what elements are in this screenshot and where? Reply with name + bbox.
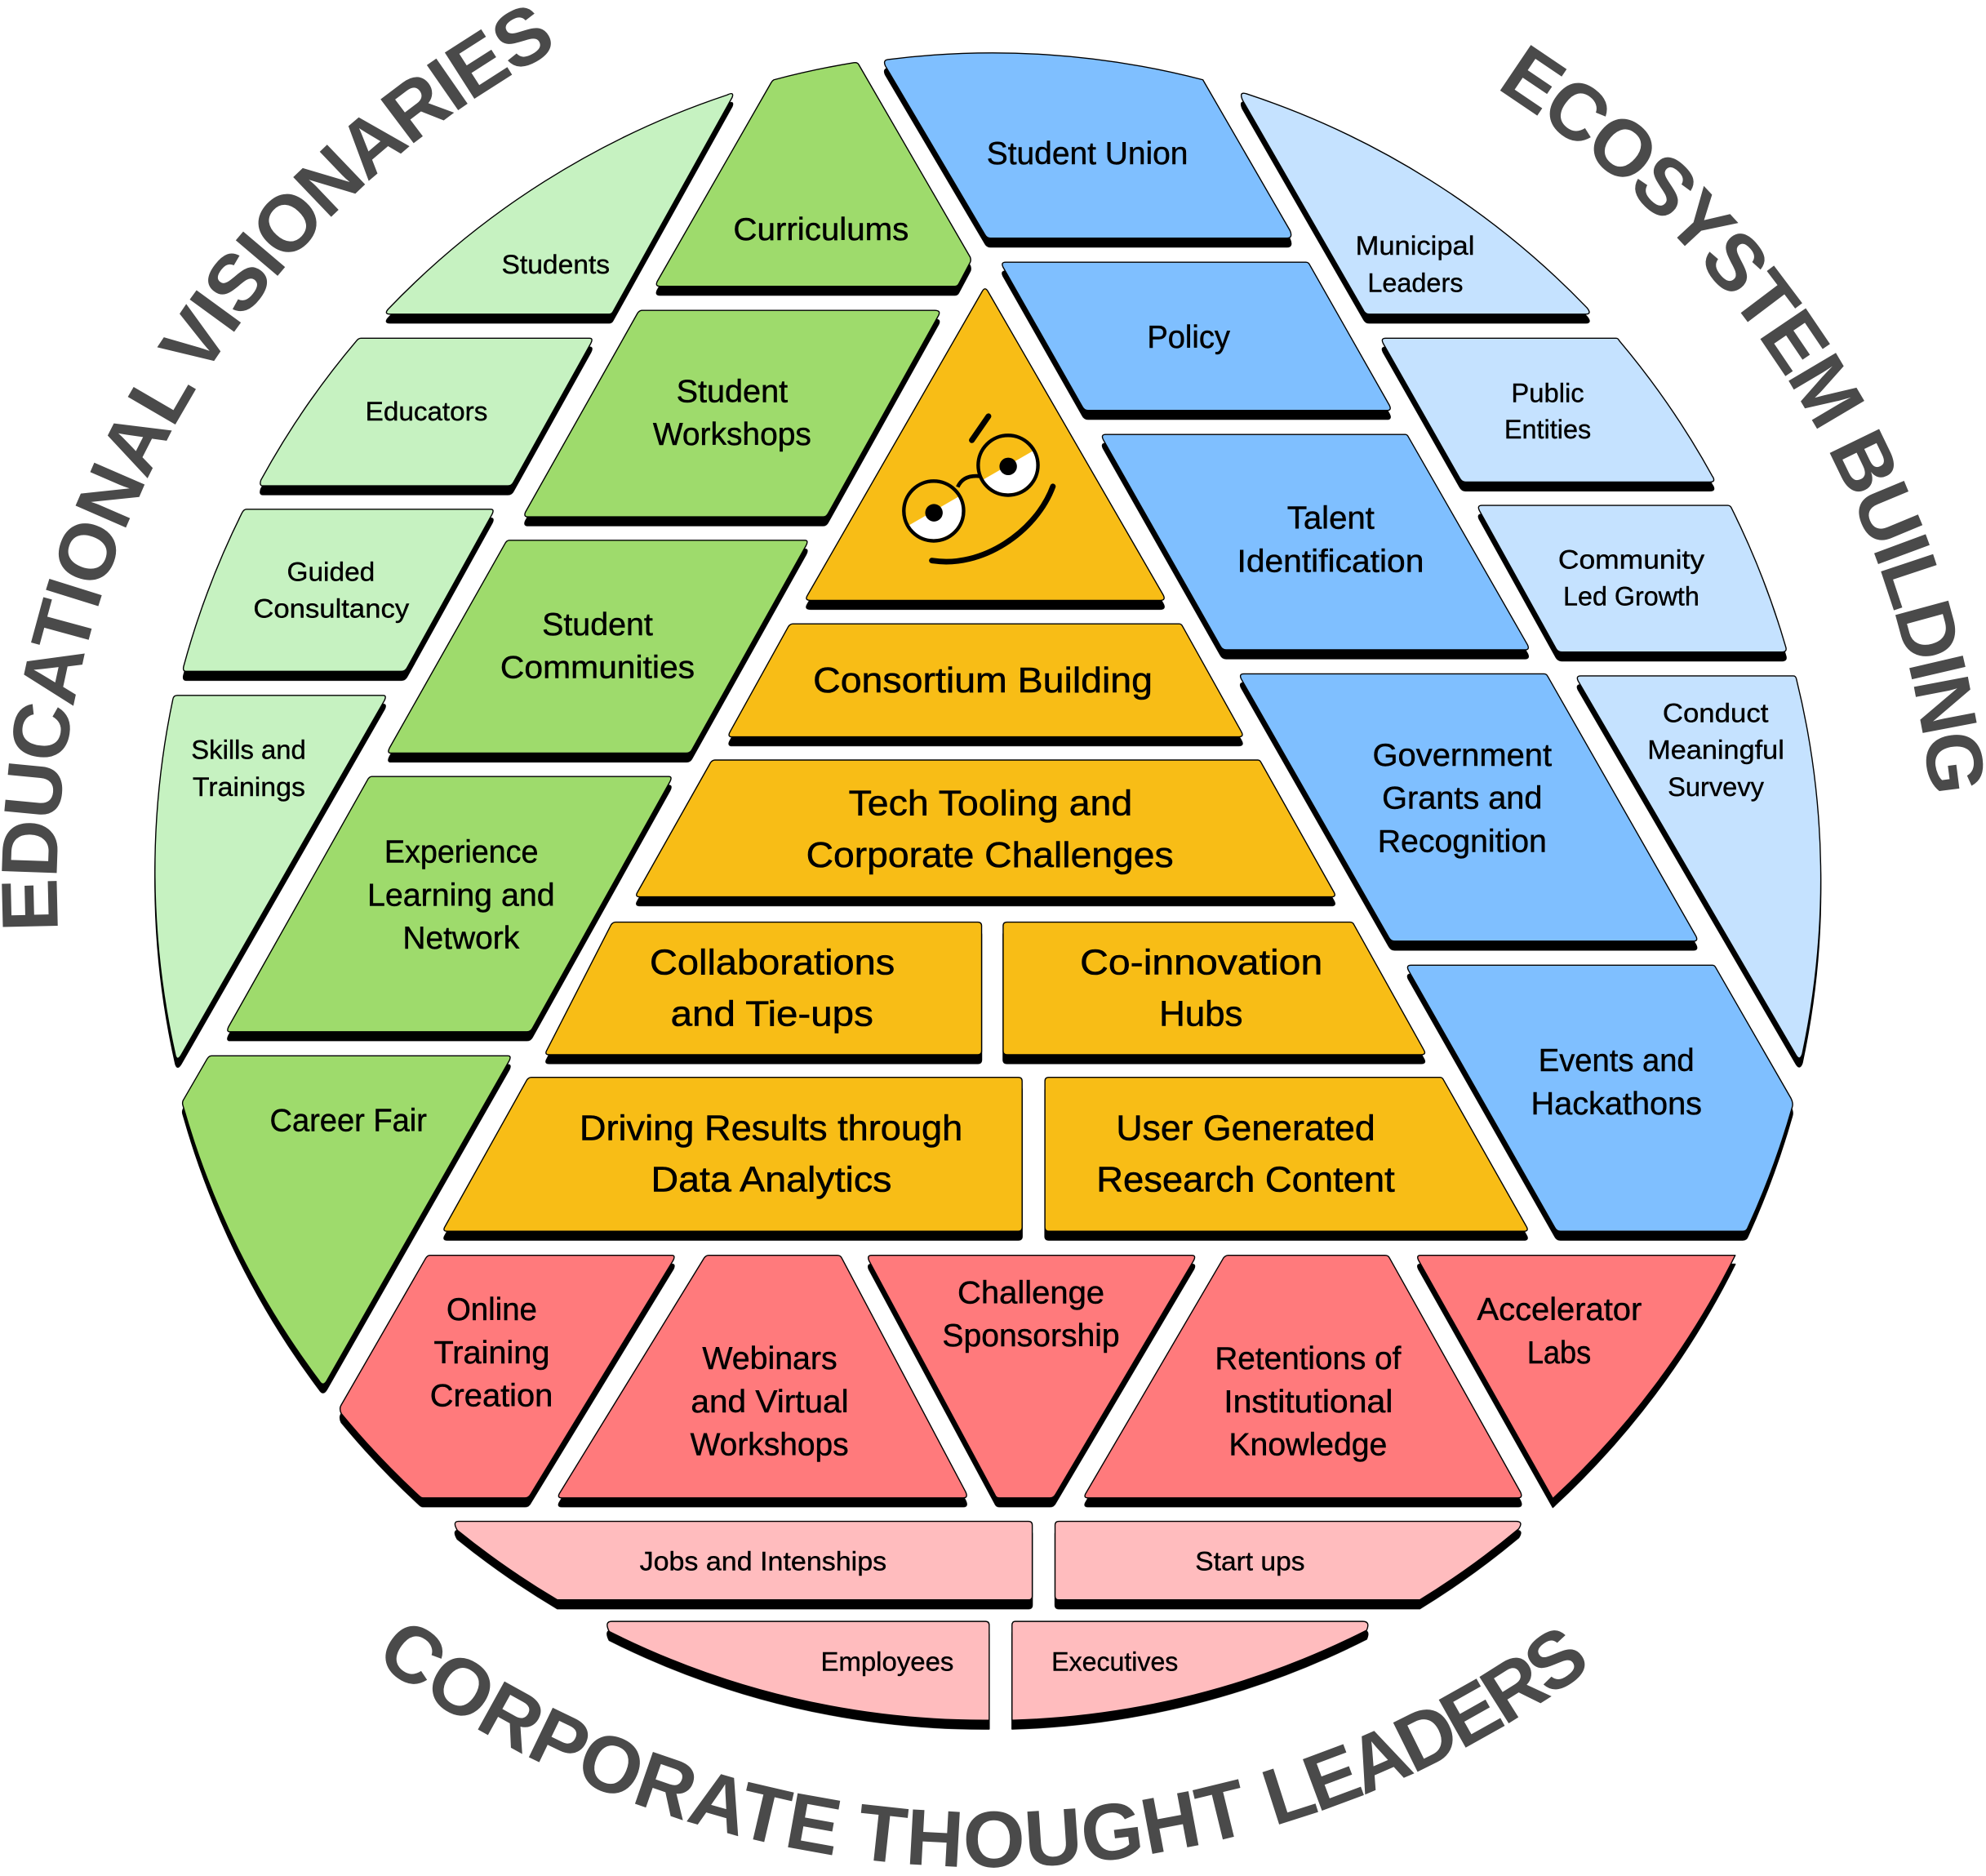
panel: mascot triangle	[806, 289, 1164, 600]
panel: Co-innovation Hubs	[1003, 922, 1424, 1055]
panel: Government Grants and Recognition: Government	[1373, 738, 1552, 773]
panel: Events and Hackathons: Hackathons	[1531, 1087, 1702, 1122]
panel: Guided Consultancy: Consultancy	[253, 593, 410, 623]
panel: Jobs and Intenships: Jobs and Intenships	[640, 1546, 886, 1576]
panel: Retentions of Institutional Knowledge: Institutional	[1224, 1385, 1393, 1420]
panel: Driving Results through Data Analytics: Driving Results through	[580, 1109, 962, 1148]
heading: Corporate Thought Leaders: CORPORATE	[385, 1626, 841, 1855]
panel: Government Grants and Recognition	[1241, 673, 1697, 941]
panel: User Generated Research Content: User Generated	[1116, 1109, 1375, 1148]
panel: Guided Consultancy: Guided	[287, 557, 375, 586]
panel: Online Training Creation: Online	[447, 1292, 537, 1327]
panel: Retentions of Institutional Knowledge: Retentions of	[1215, 1341, 1402, 1376]
panel: Government Grants and Recognition: Recognition	[1378, 824, 1547, 859]
panel: Public Entities	[1382, 338, 1714, 482]
panel: Conduct Meaningful Survevy: Survevy	[1668, 772, 1765, 802]
heading: Corporate Thought Leaders: LEADERS	[1262, 1630, 1585, 1825]
panel: Online Training Creation	[340, 1256, 674, 1498]
panel: Collaborations and Tie-ups: Collaborations	[650, 944, 895, 983]
panel: Guided Consultancy	[184, 509, 493, 671]
panel: Challenge Sponsorship	[869, 1256, 1195, 1498]
panel: Accelerator Labs: Labs	[1527, 1336, 1591, 1371]
panel: Driving Results through Data Analytics	[444, 1078, 1022, 1231]
panel: User Generated Research Content	[1045, 1078, 1527, 1231]
panel: Tech Tooling and Corporate Challenges: Tech Tooling and	[849, 784, 1132, 823]
panel: Policy	[1002, 262, 1390, 411]
panel: Students: Students	[501, 250, 610, 279]
panel: Community Led Growth: Led Growth	[1563, 582, 1699, 611]
panel: Driving Results through Data Analytics: Data Analytics	[651, 1160, 891, 1199]
panel: Student Communities	[389, 540, 807, 753]
panel: Community Led Growth	[1478, 505, 1786, 652]
panel: Experience Learning and Network: Learning and	[367, 878, 555, 913]
panel: Consortium Building: Consortium Building	[813, 661, 1153, 700]
panel: Experience Learning and Network	[228, 776, 671, 1032]
panel: Municipal Leaders: Leaders	[1367, 269, 1463, 298]
panel: Start ups	[1055, 1522, 1521, 1600]
panel: Student Workshops: Student	[677, 374, 788, 409]
panel: Municipal Leaders: Municipal	[1356, 231, 1474, 260]
heading: Educational Visionaries	[2, 7, 551, 927]
panel: Jobs and Intenships	[455, 1522, 1033, 1600]
panel: Public Entities: Entities	[1504, 415, 1591, 444]
panel: Skills and Trainings	[155, 696, 385, 1058]
panel: Career Fair: Career Fair	[270, 1103, 427, 1138]
panel: Events and Hackathons	[1407, 965, 1793, 1231]
heading: Corporate Thought Leaders	[385, 1626, 1585, 1868]
panel: Curriculums: Curriculums	[733, 212, 909, 247]
panel: Webinars and Virtual Workshops: Workshops	[691, 1428, 849, 1463]
panel: Career Fair	[183, 1056, 510, 1384]
panel: Online Training Creation: Creation	[430, 1379, 553, 1414]
panel: Talent Identification: Identification	[1237, 544, 1424, 579]
panel: Skills and Trainings: Skills and	[191, 735, 306, 764]
panel: Student Union: Student Union	[987, 136, 1188, 171]
panel: Challenge Sponsorship: Challenge	[957, 1275, 1104, 1310]
panel: Webinars and Virtual Workshops: Webinars	[702, 1341, 837, 1376]
panel: Student Communities: Communities	[500, 651, 695, 686]
panel: Webinars and Virtual Workshops	[558, 1256, 966, 1498]
panel: Conduct Meaningful Survevy: Meaningful	[1647, 735, 1784, 764]
panel: Skills and Trainings: Trainings	[193, 772, 305, 802]
panel: Experience Learning and Network: Network	[402, 921, 520, 956]
panel: Student Communities: Student	[542, 607, 653, 642]
panel: Start ups: Start ups	[1195, 1546, 1305, 1576]
panel: Employees	[607, 1621, 989, 1720]
panel: Public Entities: Public	[1511, 378, 1584, 407]
panel: Students	[386, 94, 733, 314]
panel: Co-innovation Hubs: Hubs	[1159, 995, 1242, 1034]
panel: Student Union	[885, 53, 1291, 238]
panel: Talent Identification: Talent	[1287, 501, 1375, 536]
panel: Conduct Meaningful Survevy: Conduct	[1663, 698, 1768, 727]
panel: Student Workshops	[525, 310, 940, 517]
panel: Executives	[1012, 1621, 1368, 1720]
panel: Community Led Growth: Community	[1558, 545, 1705, 575]
panel: Employees: Employees	[820, 1647, 953, 1677]
panel: Municipal Leaders	[1242, 93, 1589, 314]
panel: Government Grants and Recognition: Grants and	[1382, 781, 1542, 816]
panel: Talent Identification	[1102, 434, 1528, 650]
panel: Policy: Policy	[1147, 320, 1231, 355]
panel: Tech Tooling and Corporate Challenges	[637, 760, 1335, 897]
panel: Consortium Building	[729, 624, 1242, 737]
panel: Challenge Sponsorship: Sponsorship	[942, 1318, 1120, 1354]
panel: Collaborations and Tie-ups: and Tie-ups	[671, 995, 873, 1034]
panel: Executives: Executives	[1051, 1647, 1178, 1677]
panel: Educators: Educators	[366, 397, 487, 426]
panel: Accelerator Labs	[1418, 1256, 1735, 1499]
icon: glasses face	[904, 416, 1053, 562]
panel: Webinars and Virtual Workshops: and Virtual	[691, 1385, 849, 1420]
panel: Retentions of Institutional Knowledge: Knowledge	[1228, 1428, 1387, 1463]
panel: Collaborations and Tie-ups	[546, 922, 982, 1055]
panel: Retentions of Institutional Knowledge	[1085, 1256, 1522, 1498]
panel: Co-innovation Hubs: Co-innovation	[1080, 944, 1322, 983]
panel: Tech Tooling and Corporate Challenges: Corporate Challenges	[806, 836, 1174, 875]
panel: Conduct Meaningful Survevy	[1577, 676, 1821, 1058]
panel: Curriculums	[656, 63, 971, 287]
panel: Online Training Creation: Training	[433, 1336, 549, 1371]
panel: Experience Learning and Network: Experience	[384, 835, 538, 870]
panel: Events and Hackathons: Events and	[1539, 1043, 1695, 1078]
panel: Educators	[260, 338, 592, 486]
panel: User Generated Research Content: Research Content	[1096, 1160, 1395, 1199]
panel: Student Workshops: Workshops	[653, 417, 811, 452]
panel: Accelerator Labs: Accelerator	[1477, 1292, 1642, 1327]
